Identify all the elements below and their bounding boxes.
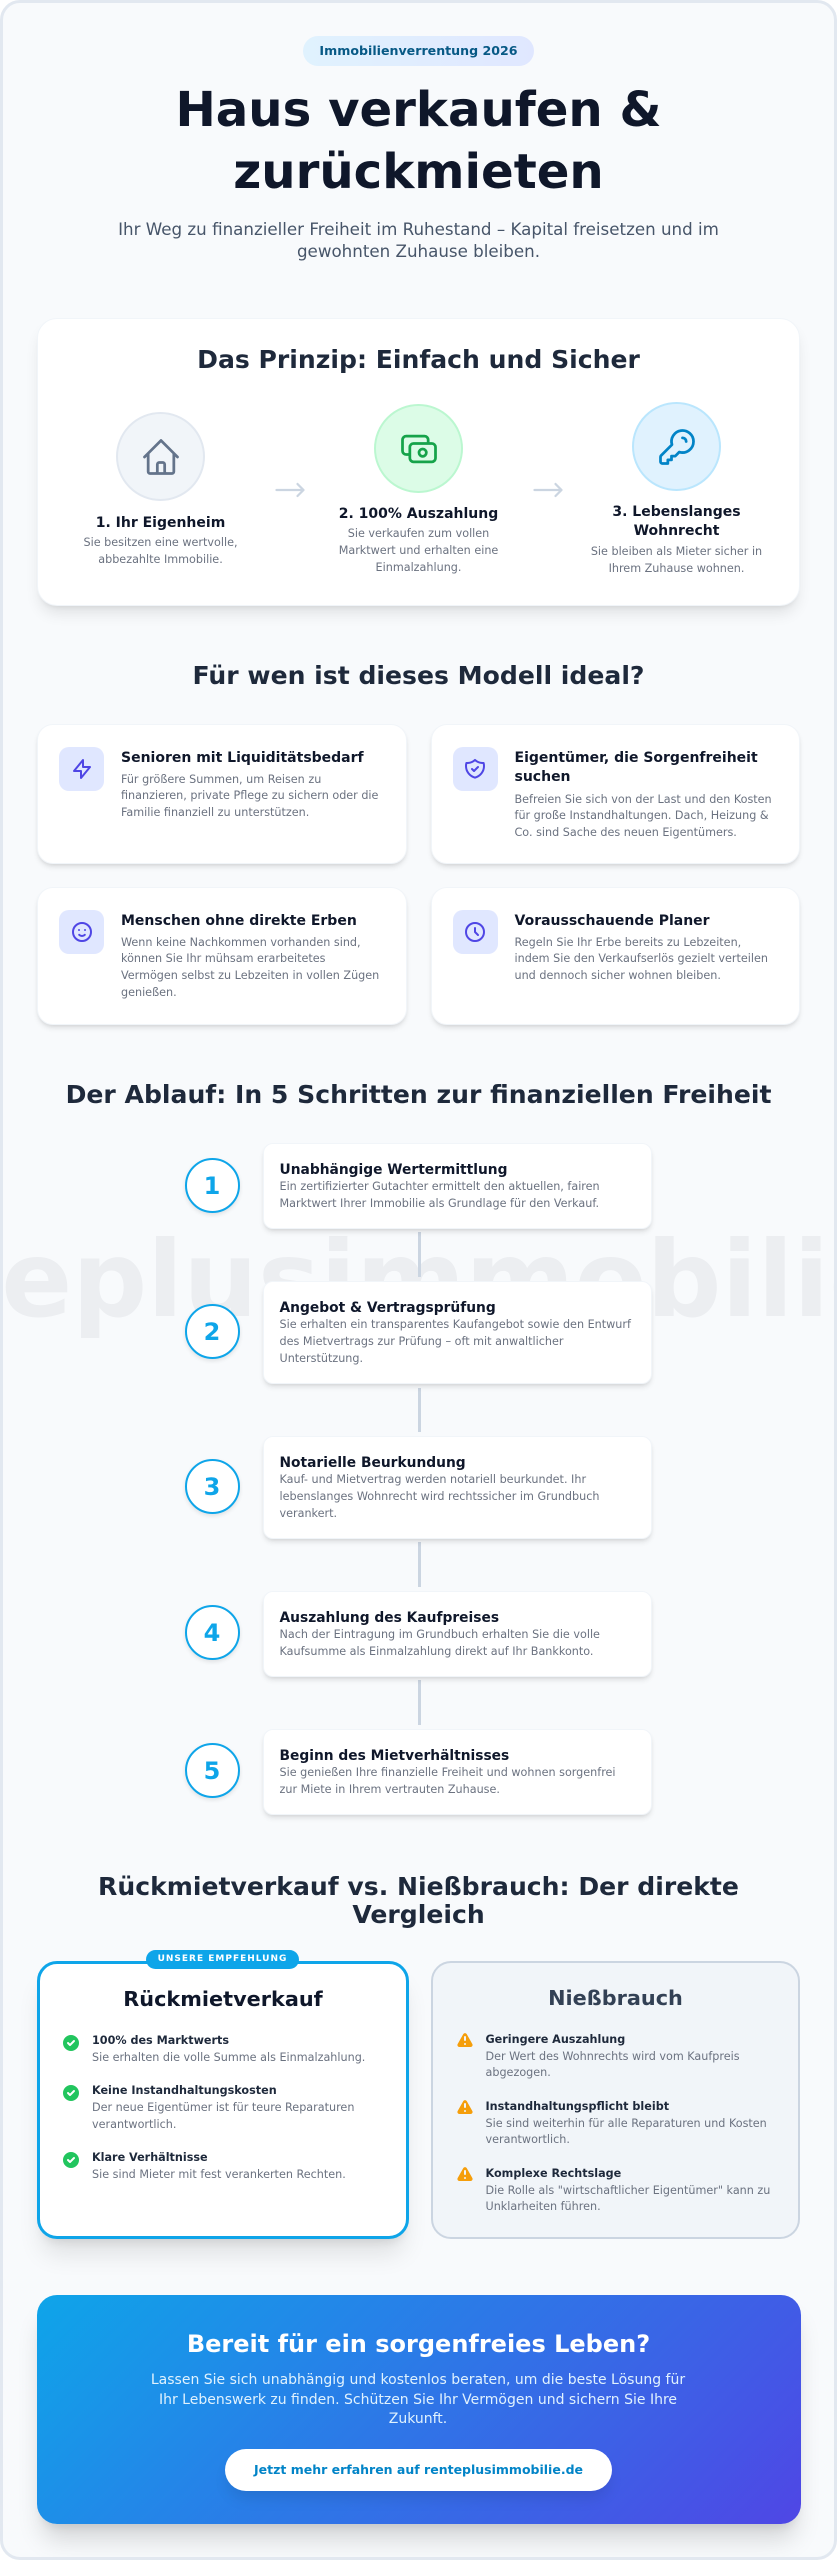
step text: [280, 1766, 616, 1796]
card text: indem Sie den Verkaufserlös gezielt verteilen: [514, 952, 768, 965]
card text: Für größere Summen, um Reisen zu: [121, 772, 321, 786]
card text: Familie finanziell zu unterstützen.: [121, 806, 309, 819]
drawback 2: [457, 2100, 767, 2146]
panel: principle: [37, 318, 800, 606]
icon: smile: [59, 910, 104, 954]
step title: Angebot & Vertragsprüfung: [280, 1300, 496, 1316]
benefit title: Klare Verhältnisse: [92, 2150, 208, 2164]
card title: Vorausschauende Planer: [514, 913, 710, 929]
arrow 1: [276, 482, 304, 498]
CTA text: Lassen Sie sich unabhängig und kostenlos beraten, um die beste Lösung für: [151, 2372, 685, 2388]
step 3 title: 3. Lebenslanges: [612, 504, 741, 520]
step number 1: 1: [204, 1172, 220, 1200]
subtitle: Ihr Weg zu finanzieller Freiheit im Ruhestand – Kapital freisetzen und im: [118, 219, 719, 239]
card title: [514, 750, 758, 785]
step number 4: [184, 1605, 240, 1660]
card: no heirs: [37, 887, 407, 1025]
step 3 description: [591, 545, 762, 575]
card title: Eigentümer, die Sorgenfreiheit: [514, 750, 758, 766]
step 3 title: [612, 504, 741, 539]
heading: target group: Für wen ist dieses Modell ideal?: [193, 661, 644, 690]
card text: genießen.: [121, 986, 177, 999]
card: owners: [430, 724, 800, 864]
drawback text: verantwortlich.: [486, 2133, 570, 2146]
connector 4: [418, 1680, 420, 1725]
drawback text: Der Wert des Wohnrechts wird vom Kaufpreis: [486, 2050, 740, 2063]
step number 3: [184, 1459, 240, 1514]
icon: check: [63, 2152, 79, 2168]
badge: recommendation: [146, 1950, 299, 1969]
drawback text: [486, 2117, 767, 2146]
step text: Kauf- und Mietvertrag werden notariell beurkundet. Ihr: [280, 1473, 586, 1486]
benefit text: verantwortlich.: [92, 2118, 176, 2131]
step 2 description: Sie verkaufen zum vollen: [348, 527, 489, 540]
card text: [121, 936, 379, 999]
drawback title: Instandhaltungspflicht bleibt: [486, 2100, 669, 2113]
benefit 3: [63, 2150, 346, 2180]
icon: key: [632, 402, 721, 491]
benefit text: Sie erhalten die volle Summe als Einmalzahlung.: [92, 2050, 365, 2064]
panel: Nießbrauch: [431, 1961, 800, 2239]
step text: verankert.: [280, 1507, 337, 1520]
step number 2: [184, 1304, 240, 1359]
icon: shield: [452, 747, 498, 791]
panel: Rückmietverkauf: [37, 1961, 409, 2239]
benefit text: Sie sind Mieter mit fest verankerten Rechten.: [92, 2168, 346, 2180]
step title: Unabhängige Wertermittlung: [280, 1162, 508, 1178]
heading: comparison: Rückmietverkauf vs. Nießbrauch: Der direkte: [98, 1872, 739, 1900]
card text: für große Instandhaltungen. Dach, Heizung &: [514, 809, 769, 822]
icon: clock: [452, 910, 498, 954]
principle heading: Das Prinzip: Einfach und Sicher: [197, 345, 640, 374]
card title: Menschen ohne direkte Erben: [121, 913, 357, 929]
step 3 description: Ihrem Zuhause wohnen.: [609, 562, 744, 575]
drawback 1: [457, 2033, 740, 2079]
step text: [280, 1473, 599, 1520]
icon: warning: [457, 2033, 473, 2047]
benefit title: Keine Instandhaltungskosten: [92, 2084, 277, 2097]
benefit title: 100% des Marktwerts: [92, 2034, 229, 2046]
step 3 title: Wohnrecht: [634, 523, 719, 539]
connector 2: [418, 1388, 420, 1432]
header pill: Immobilienverrentung 2026: [319, 43, 518, 58]
card text: Befreien Sie sich von der Last und den Kosten: [514, 792, 772, 806]
card text: [514, 936, 768, 982]
card text: Vermögen selbst zu Lebzeiten in vollen Zügen: [121, 969, 379, 982]
step text: des Mietvertrags zur Prüfung – oft mit anwaltlicher: [280, 1335, 563, 1348]
CTA text: Ihr Lebenswerk zu finden. Schützen Sie Ihr Vermögen und sichern Sie Ihre: [159, 2392, 677, 2408]
card title: Senioren mit Liquiditätsbedarf: [121, 750, 364, 766]
step title: Auszahlung des Kaufpreises: [280, 1610, 499, 1626]
benefit 1: [63, 2034, 365, 2064]
step text: Nach der Eintragung im Grundbuch erhalten Sie die volle: [280, 1628, 600, 1641]
card text: Wenn keine Nachkommen vorhanden sind,: [121, 936, 361, 948]
step card 2: [262, 1281, 652, 1384]
drawback text: [486, 2184, 770, 2213]
step 1 title: 1. Ihr Eigenheim: [96, 515, 225, 531]
card: planners: [430, 887, 800, 1025]
step card 4: [262, 1591, 652, 1677]
card text: [121, 772, 378, 819]
drawback 3: [457, 2167, 770, 2213]
card title: suchen: [514, 769, 571, 785]
step text: Sie genießen Ihre finanzielle Freiheit und wohnen sorgenfrei: [280, 1766, 616, 1779]
step text: [280, 1628, 600, 1658]
step 3 description: Sie bleiben als Mieter sicher in: [591, 545, 762, 558]
CTA text: Zukunft.: [389, 2411, 447, 2427]
step number 5: [184, 1743, 240, 1798]
drawback text: Unklarheiten führen.: [486, 2200, 601, 2213]
step number 1: [184, 1158, 240, 1213]
icon: money: [374, 404, 463, 493]
benefit text: [92, 2101, 354, 2131]
step text: Ein zertifizierter Gutachter ermittelt den aktuellen, fairen: [280, 1180, 600, 1193]
drawback text: [486, 2050, 740, 2079]
column heading: Nießbrauch: [548, 1986, 683, 2010]
step number 2: 2: [204, 1318, 220, 1346]
icon: warning: [457, 2167, 473, 2181]
step 1 description: abbezahlte Immobilie.: [98, 553, 223, 566]
title: Haus verkaufen &: [175, 82, 662, 138]
card: seniors: [37, 724, 407, 864]
step 2 description: Marktwert und erhalten eine: [339, 544, 498, 557]
icon: check: [63, 2035, 79, 2051]
step card 5: [262, 1729, 652, 1815]
step 2 description: [339, 527, 498, 574]
step text: Sie erhalten ein transparentes Kaufangebot sowie den Entwurf: [280, 1318, 631, 1331]
step 1 description: [83, 536, 238, 566]
icon: check: [63, 2085, 79, 2101]
header pill: [303, 36, 534, 66]
connector 1: [418, 1232, 420, 1277]
panel: call to action: [37, 2295, 801, 2524]
step number 5: 5: [204, 1756, 220, 1784]
badge: recommendation: UNSERE EMPFEHLUNG: [158, 1954, 287, 1964]
step card 1: [262, 1143, 652, 1229]
benefit 2: [63, 2084, 354, 2131]
drawback title: Komplexe Rechtslage: [486, 2167, 621, 2180]
CTA button: [225, 2449, 612, 2491]
card text: und dennoch sicher wohnen bleiben.: [514, 969, 721, 982]
icon: warning: [457, 2100, 473, 2114]
step text: Kaufsumme als Einmalzahlung direkt auf Ihr Bankkonto.: [280, 1645, 593, 1658]
icon: lightning: [59, 747, 104, 791]
card text: Regeln Sie Ihr Erbe bereits zu Lebzeiten,: [514, 936, 741, 948]
benefit text: Der neue Eigentümer ist für teure Reparaturen: [92, 2101, 354, 2114]
step 2 title: 2. 100% Auszahlung: [339, 506, 498, 522]
step text: lebenslanges Wohnrecht wird rechtssicher im Grundbuch: [280, 1490, 599, 1503]
step title: Notarielle Beurkundung: [280, 1454, 466, 1470]
card text: finanzieren, private Pflege zu sichern oder die: [121, 789, 378, 802]
step text: zur Miete in Ihrem vertrauten Zuhause.: [280, 1783, 500, 1796]
icon: house: [116, 412, 205, 501]
connector 3: [418, 1542, 420, 1587]
step card 3: [262, 1436, 652, 1539]
heading: process: Der Ablauf: In 5 Schritten zur finanziellen Freiheit: [66, 1080, 771, 1109]
drawback title: Geringere Auszahlung: [486, 2033, 625, 2046]
column heading: Rückmietverkauf: [123, 1987, 323, 2011]
card text: [514, 792, 772, 839]
CTA heading: Bereit für ein sorgenfreies Leben?: [187, 2330, 650, 2358]
drawback text: abgezogen.: [486, 2066, 551, 2079]
card text: Co. sind Sache des neuen Eigentümers.: [514, 826, 737, 839]
heading: comparison: Vergleich: [352, 1900, 485, 1929]
subtitle: gewohnten Zuhause bleiben.: [297, 241, 540, 261]
step text: [280, 1318, 632, 1365]
title: zurückmieten: [233, 144, 604, 200]
CTA button: Jetzt mehr erfahren auf renteplusimmobilie.de: [254, 2462, 583, 2477]
step text: Marktwert Ihrer Immobilie als Grundlage für den Verkauf.: [280, 1197, 599, 1210]
step number 4: 4: [204, 1618, 220, 1646]
drawback text: Sie sind weiterhin für alle Reparaturen und Kosten: [486, 2117, 767, 2130]
step number 3: 3: [204, 1472, 220, 1500]
step title: Beginn des Mietverhältnisses: [280, 1748, 509, 1764]
step text: [280, 1180, 600, 1210]
card text: können Sie Ihr mühsam erarbeitetes: [121, 952, 325, 965]
heading: comparison: [98, 1872, 739, 1929]
drawback text: Die Rolle als "wirtschaftlicher Eigentümer" kann zu: [486, 2184, 770, 2197]
step text: Unterstützung.: [280, 1352, 363, 1365]
subtitle: [118, 219, 719, 261]
CTA text: [151, 2372, 686, 2427]
title: [175, 82, 662, 200]
step 1 description: Sie besitzen eine wertvolle,: [83, 536, 238, 549]
arrow 2: [534, 482, 562, 498]
step 2 description: Einmalzahlung.: [376, 561, 461, 574]
